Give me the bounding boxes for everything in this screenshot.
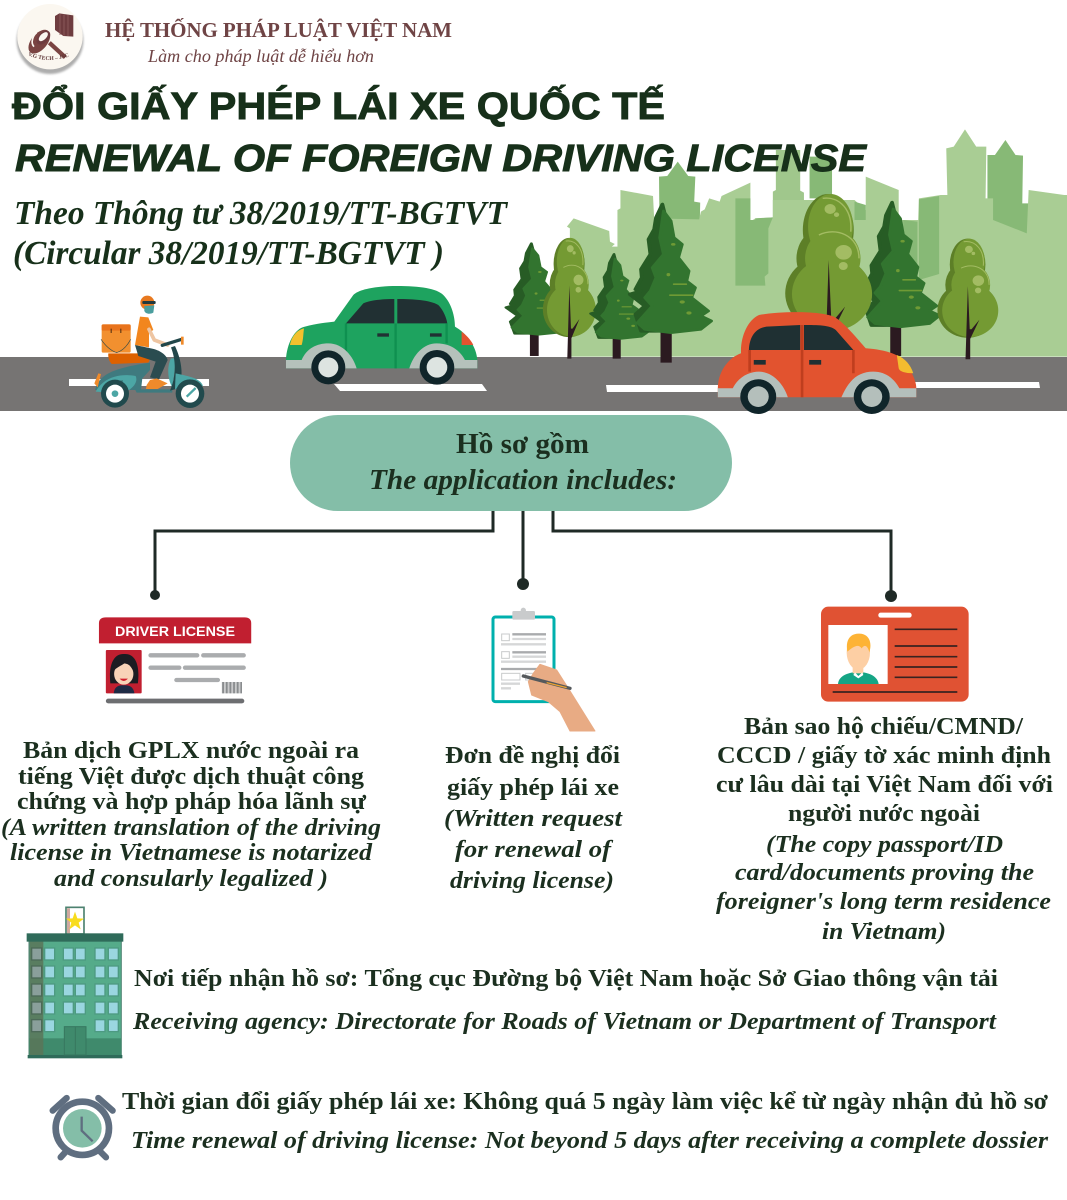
Vietnamese title: ĐỔI GIẤY PHÉP LÁI XE QUỐC TẾ bbox=[12, 83, 665, 128]
application heading pill: Hồ sơ gồm bbox=[456, 429, 589, 460]
trees bbox=[506, 194, 998, 363]
legal basis English: (Circular 38/2019/TT-BGTVT ) bbox=[13, 235, 444, 272]
icon: driver license card bbox=[99, 617, 251, 703]
receiving agency text: Nơi tiếp nhận hồ sơ: Tổng cục Đường bộ Việt Nam hoặc Sở Giao thông vận tải bbox=[134, 965, 998, 992]
green car bbox=[286, 286, 477, 385]
logo: gavel seal bbox=[16, 4, 84, 76]
logo: gavel seal: V.G TECH – JSC bbox=[29, 52, 69, 60]
icon: government building bbox=[27, 907, 123, 1058]
renewal time text: Thời gian đổi giấy phép lái xe: Không quá 5 ngày làm việc kể từ ngày nhận đủ hồ sơ bbox=[122, 1088, 1048, 1115]
text: copy of passport or ID: in Vietnam) bbox=[822, 918, 946, 945]
text: translated license: license in Vietnamese is notarized bbox=[10, 839, 373, 866]
text: written request: driving license) bbox=[450, 867, 614, 894]
organisation slogan: Làm cho pháp luật dễ hiểu hơn bbox=[147, 46, 374, 66]
text: written request: Đơn đề nghị đổi bbox=[445, 742, 620, 769]
application heading pill bbox=[290, 415, 732, 511]
connectors from pill to documents bbox=[150, 511, 897, 602]
text: copy of passport or ID: cư lâu dài tại Việt Nam đối với bbox=[716, 771, 1053, 798]
text: copy of passport or ID: CCCD / giấy tờ xác minh định bbox=[717, 742, 1051, 769]
text: translated license: and consularly legalized ) bbox=[54, 865, 328, 892]
icon: clipboard with hand signing bbox=[493, 608, 595, 731]
red car bbox=[718, 312, 916, 414]
city skyline bbox=[567, 129, 1067, 357]
text: written request bbox=[444, 742, 623, 894]
organisation name: HỆ THỐNG PHÁP LUẬT VIỆT NAM bbox=[105, 18, 452, 42]
title bbox=[12, 83, 868, 272]
text: written request: for renewal of bbox=[455, 836, 614, 863]
license label: DRIVER LICENSE bbox=[115, 624, 235, 639]
text: copy of passport or ID: Bản sao hộ chiếu/CMND/ bbox=[744, 713, 1024, 740]
motorbike courier bbox=[94, 296, 204, 408]
icon: ID card bbox=[821, 607, 969, 702]
receiving agency text bbox=[132, 965, 998, 1035]
renewal time text bbox=[122, 1088, 1048, 1154]
text: copy of passport or ID: foreigner's long term residence bbox=[716, 888, 1051, 915]
text: copy of passport or ID: (The copy passport/ID bbox=[766, 831, 1003, 858]
road bbox=[0, 357, 1067, 411]
renewal time text: Time renewal of driving license: Not beyond 5 days after receiving a complete dossier bbox=[131, 1127, 1048, 1154]
road scene with city skyline, trees and vehicles bbox=[0, 129, 1067, 414]
text: copy of passport or ID: card/documents proving the bbox=[735, 859, 1034, 886]
text: translated license: Bản dịch GPLX nước ngoài ra bbox=[23, 737, 359, 764]
text: written request: (Written request bbox=[444, 805, 623, 832]
lane markings bbox=[69, 379, 1040, 392]
application heading pill: The application includes: bbox=[369, 465, 677, 496]
header: organisation logo and name bbox=[16, 4, 452, 76]
text: copy of passport or ID bbox=[716, 713, 1053, 945]
legal basis Vietnamese: Theo Thông tư 38/2019/TT-BGTVT bbox=[14, 195, 508, 232]
text: translated license: tiếng Việt được dịch thuật công bbox=[18, 763, 365, 790]
receiving agency text: Receiving agency: Directorate for Roads of Vietnam or Department of Transport bbox=[132, 1008, 997, 1035]
text: translated license: (A written translation of the driving bbox=[1, 814, 381, 841]
text: written request: giấy phép lái xe bbox=[447, 774, 619, 801]
text: translated license: chứng và hợp pháp hóa lãnh sự bbox=[17, 788, 366, 815]
text: copy of passport or ID: người nước ngoài bbox=[788, 800, 980, 827]
icon: alarm clock bbox=[53, 1098, 113, 1157]
English title: RENEWAL OF FOREIGN DRIVING LICENSE bbox=[15, 138, 868, 180]
text: translated license bbox=[1, 737, 381, 892]
